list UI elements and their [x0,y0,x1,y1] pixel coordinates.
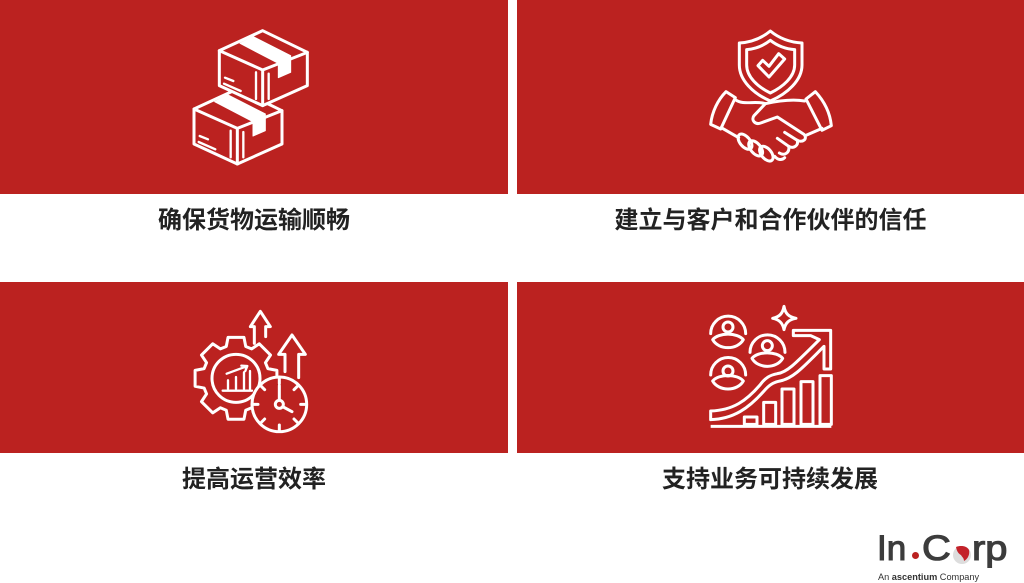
caption: trust: 建立与客户和合作伙伴的信任 [614,207,926,234]
logo wordmark: rp [972,529,1007,568]
logo wordmark [877,529,1007,568]
caption: cargo: 确保货物运输顺畅 [158,207,350,234]
arrows [250,311,305,378]
panel: trust [517,0,1024,194]
shield [739,31,802,101]
panel: growth [517,282,1024,453]
icon: stacked boxes [192,29,309,166]
logo red dot [912,552,919,559]
logo wordmark: In [877,529,906,568]
caption: growth: 支持业务可持续发展 [662,466,878,493]
logo: InCorp [877,529,1007,582]
upper box [219,31,307,106]
caption: efficiency: 提高运营效率 [182,466,326,493]
gear inner circle and chart [212,354,260,402]
panel: cargo [0,0,508,194]
logo wordmark: C [922,529,951,568]
icon: gear, clock and arrows [194,310,308,434]
people [711,316,785,389]
growth arrow [711,330,831,420]
bars [711,376,831,426]
gear [195,337,277,419]
handshake [711,92,831,164]
panel: efficiency [0,282,508,453]
sparkle [773,306,796,330]
icon: shield and handshake [709,30,833,163]
clock [252,377,307,432]
icon: people and growth chart [709,304,833,428]
logo globe [953,546,971,564]
lower box [194,89,282,164]
logo tagline: An ascentium Company [878,572,979,582]
